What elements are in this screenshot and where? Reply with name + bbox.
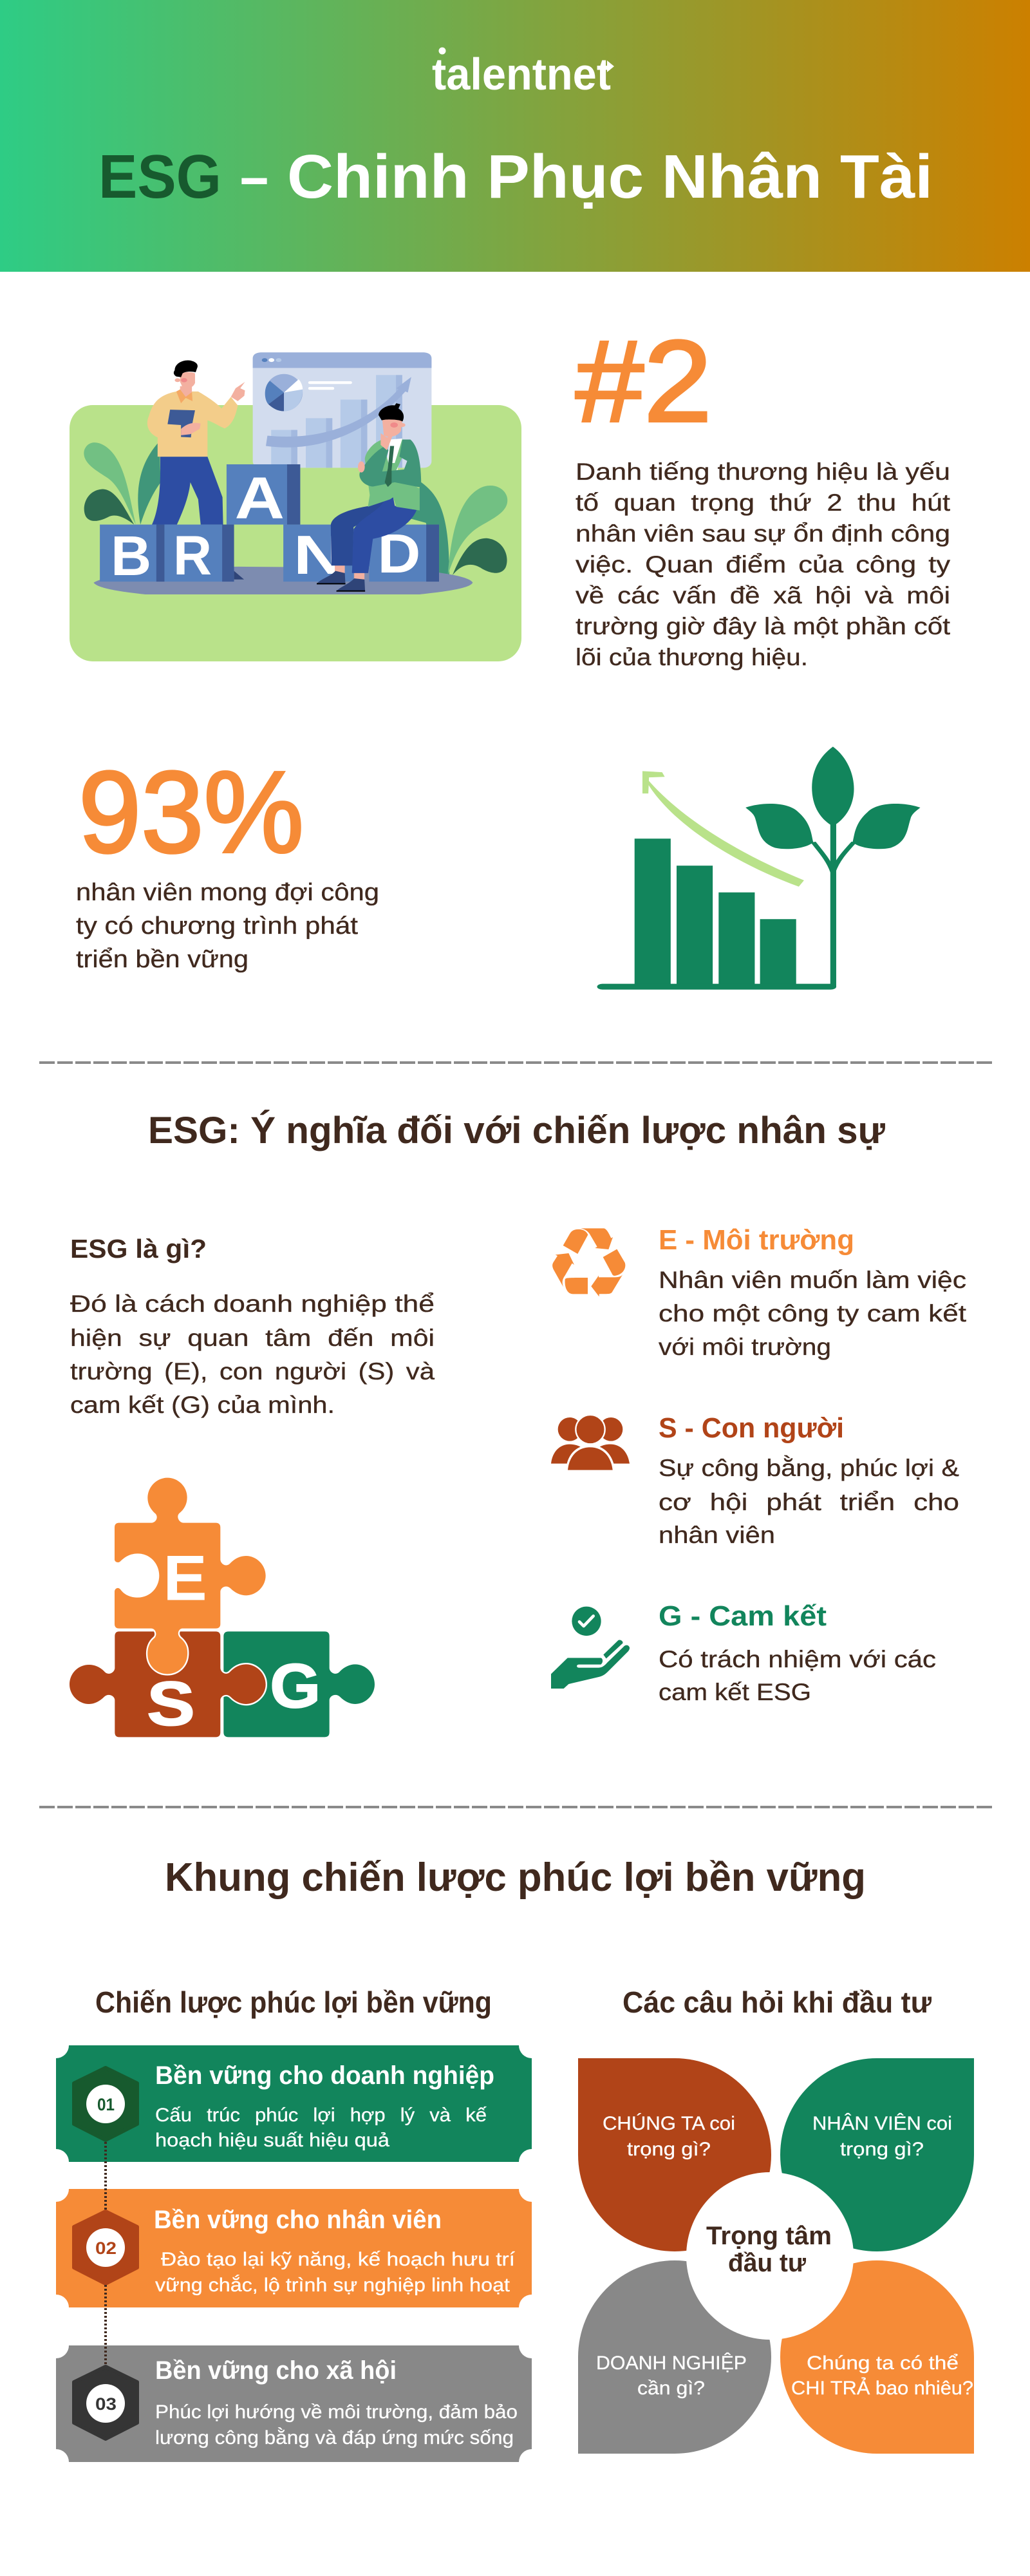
banner 02: employees: vững chắc, lộ trình sự nghiệp linh hoạt: [155, 2275, 510, 2296]
center circle: đầu tư: [728, 2249, 806, 2277]
banner 01: business: Cấu trúc phúc lợi hợp lý và kế: [155, 2105, 487, 2126]
big number 93%: 93%: [79, 748, 304, 877]
banner 03: society: 03: [95, 2394, 117, 2414]
plants right: [410, 482, 507, 575]
blocks spelling BRAND: A: [235, 464, 285, 531]
item: S people: Sự công bằng, phúc lợi &: [659, 1455, 959, 1481]
diagram: investment focus: [578, 2058, 974, 2454]
text block: 93% employees: [76, 879, 379, 973]
connector: dotted timeline: [104, 2142, 107, 2365]
text block: brand reputation: trường giờ đây là một phần cốt: [576, 613, 951, 639]
banner 01: business: 01: [97, 2095, 115, 2114]
puzzle piece E: E: [163, 1543, 207, 1615]
icon: hand with check: [551, 1607, 630, 1689]
text block: 93% employees: triển bền vững: [76, 946, 248, 973]
panel: brand illustration: [70, 352, 521, 661]
text block: brand reputation: tố quan trọng thứ 2 thu hút: [576, 489, 951, 516]
subheading: strategy: Chiến lược phúc lợi bền vững: [95, 1985, 492, 2019]
quadrant: how much we can pay: CHI TRẢ bao nhiêu?: [791, 2377, 973, 2399]
icon: people: [551, 1415, 630, 1470]
icon: bar chart with plant and arrow: [597, 746, 921, 990]
blocks spelling BRAND: D: [378, 522, 420, 584]
text block: ESG definition: cam kết (G) của mình.: [70, 1392, 335, 1418]
blocks spelling BRAND: [100, 464, 439, 587]
item: E environment: E - Môi trường: [659, 1224, 854, 1256]
chart window: [253, 352, 431, 468]
item: S people: cơ hội phát triển cho: [659, 1489, 959, 1515]
text block: brand reputation: Danh tiếng thương hiệu là yếu: [576, 459, 950, 485]
banner 02: employees: Bền vững cho nhân viên: [154, 2206, 442, 2234]
banner 03: society: Bền vững cho xã hội: [155, 2356, 397, 2385]
item: G commitment: Có trách nhiệm với các: [659, 1646, 936, 1672]
puzzle E S G: [70, 1478, 375, 1739]
text block: brand reputation: lõi của thương hiệu.: [576, 644, 808, 670]
plants left: [84, 442, 161, 525]
banner 03: society: [56, 2345, 532, 2462]
item: S people: [551, 1412, 959, 1548]
man sitting: [317, 403, 421, 592]
title: –: [240, 142, 268, 211]
banner 01: business: hoạch hiệu suất hiệu quả: [155, 2130, 389, 2151]
banner 01: business: [56, 2045, 532, 2162]
item: E environment: [552, 1224, 967, 1360]
heading: benefits framework: Khung chiến lược phúc lợi bền vững: [165, 1855, 866, 1900]
item: G commitment: G - Cam kết: [659, 1600, 827, 1632]
icon: recycle: [552, 1228, 625, 1296]
text block: ESG definition: Đó là cách doanh nghiệp thể: [70, 1291, 435, 1317]
puzzle piece S: S: [147, 1669, 195, 1739]
item: E environment: với môi trường: [659, 1334, 831, 1360]
blocks spelling BRAND: N: [294, 524, 345, 585]
quadrant: what employees value: trọng gì?: [840, 2139, 924, 2160]
item: G commitment: [551, 1600, 936, 1705]
text block: brand reputation: việc. Quan điểm của công ty: [576, 551, 951, 578]
puzzle piece S: [70, 1631, 266, 1739]
banner 01: business: Bền vững cho doanh nghiệp: [155, 2061, 494, 2090]
subheading: what is ESG: ESG là gì?: [70, 1234, 207, 1264]
text block: ESG definition: hiện sự quan tâm đến môi: [70, 1325, 435, 1351]
subheading: questions: Các câu hỏi khi đầu tư: [623, 1985, 932, 2019]
banner 03: society: lương công bằng và đáp ứng mức sống: [155, 2427, 514, 2448]
item: E environment: Nhân viên muốn làm việc: [659, 1267, 966, 1293]
center circle: [686, 2172, 854, 2340]
item: S people: nhân viên: [659, 1522, 775, 1548]
big number #2: #2: [576, 317, 712, 446]
text block: brand reputation: nhân viên sau sự ổn định công: [576, 520, 950, 547]
quadrant: what the business needs: [578, 2260, 771, 2454]
title: Chinh Phục Nhân Tài: [287, 142, 933, 211]
puzzle piece E: [115, 1478, 266, 1674]
quadrant: what the business needs: cần gì?: [637, 2378, 705, 2399]
text block: ESG definition: trường (E), con người (S) và: [70, 1358, 435, 1385]
header banner: [0, 0, 1030, 272]
text block: ESG definition: [70, 1291, 435, 1418]
banner 02: employees: 02: [95, 2239, 117, 2258]
quadrant: what the business needs: DOANH NGHIỆP: [596, 2353, 747, 2374]
blocks spelling BRAND: B: [111, 525, 151, 587]
item: G commitment: cam kết ESG: [659, 1679, 811, 1705]
title: ESG: [98, 142, 221, 211]
item: S people: S - Con người: [659, 1412, 844, 1444]
puzzle piece G: G: [270, 1651, 321, 1721]
text block: brand reputation: về các vấn đề xã hội và môi: [576, 582, 950, 609]
man standing: [147, 361, 245, 580]
quadrant: what we value: trọng gì?: [627, 2139, 711, 2160]
quadrant: what we value: [578, 2058, 771, 2251]
text block: 93% employees: nhân viên mong đợi công: [76, 879, 379, 906]
banner 03: society: Phúc lợi hướng về môi trường, đảm bảo: [155, 2401, 518, 2423]
banner 02: employees: Đào tạo lại kỹ năng, kế hoạch hưu trí: [161, 2249, 516, 2270]
heading: ESG meaning: ESG: Ý nghĩa đối với chiến lược nhân sự: [148, 1110, 885, 1151]
quadrant: how much we can pay: [780, 2260, 974, 2454]
banner 02: employees: [56, 2189, 532, 2307]
quadrant: what we value: CHÚNG TA coi: [603, 2113, 735, 2134]
text block: 93% employees: ty có chương trình phát: [76, 913, 358, 940]
blocks spelling BRAND: R: [173, 524, 212, 587]
ground shadow: [93, 567, 473, 594]
quadrant: what employees value: NHÂN VIÊN coi: [812, 2113, 952, 2134]
puzzle piece G: [223, 1631, 375, 1737]
quadrant: what employees value: [780, 2058, 974, 2251]
item: E environment: cho một công ty cam kết: [659, 1300, 967, 1327]
logo: talentnet: talentnet: [432, 49, 611, 99]
quadrant: how much we can pay: Chúng ta có thể: [807, 2353, 959, 2374]
text block: brand reputation: [576, 459, 951, 670]
center circle: Trọng tâm: [706, 2222, 832, 2250]
